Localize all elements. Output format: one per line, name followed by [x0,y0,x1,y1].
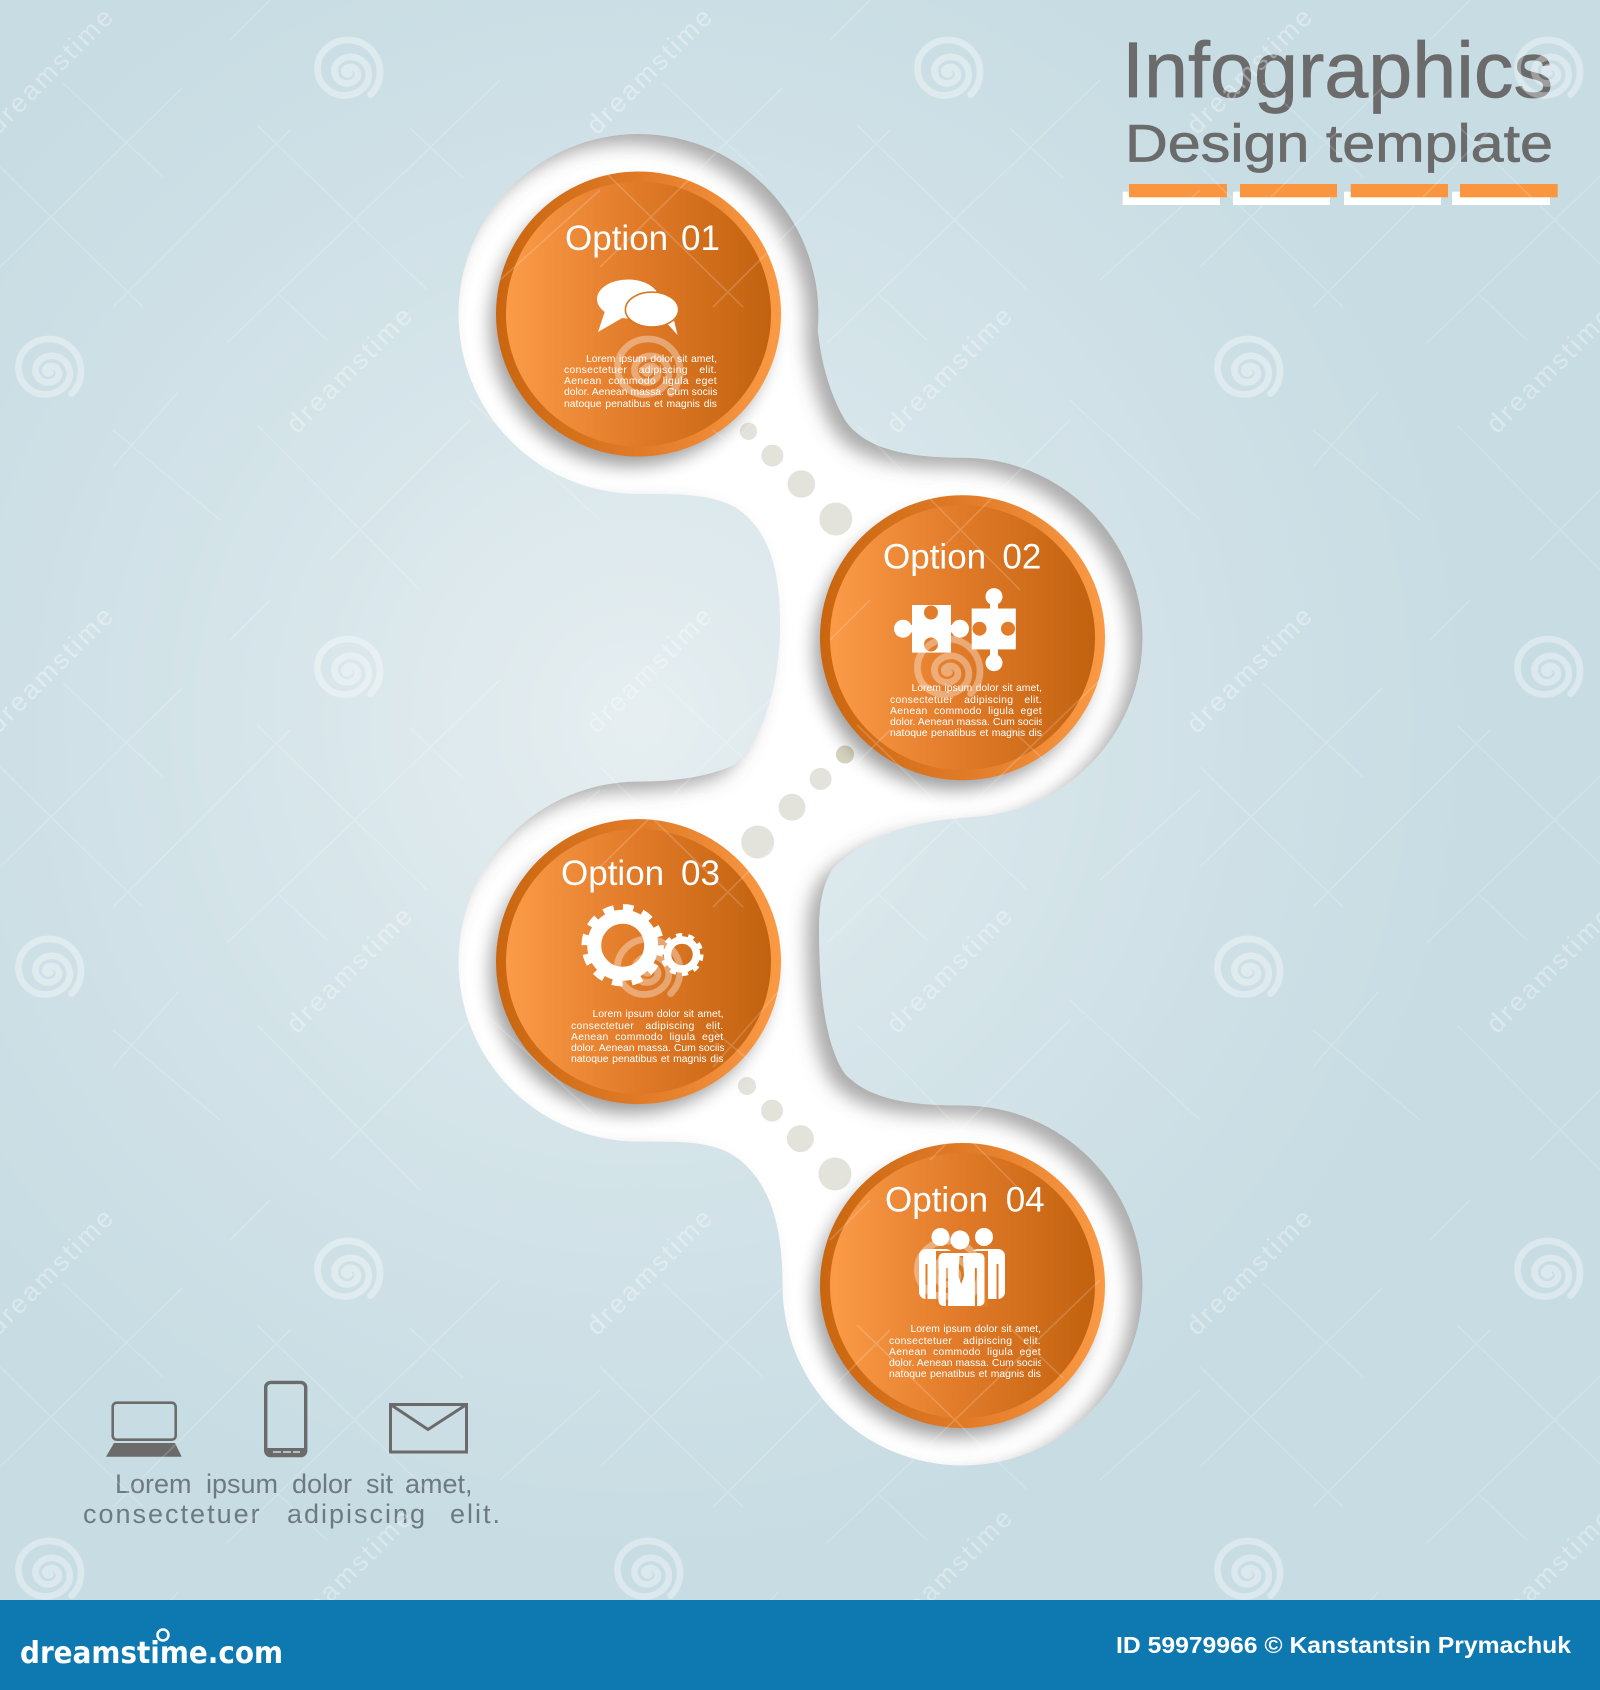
text block: option 01: Lorem ipsum dolor sit amet, [586,354,717,365]
watermark text: dreamstime [580,2,718,140]
watermark text: dreamstime [880,301,1018,439]
caption text: dolor [292,1469,352,1499]
text block: option 02: Aenean commodo ligula eget [890,706,1042,717]
caption text: sit [366,1469,393,1499]
caption text [83,1469,502,1529]
connector dots: option 1 to 2 [740,423,852,536]
text block: option 03: Aenean commodo ligula eget [571,1032,724,1043]
footer credit: ID 59979966 © Kanstantsin Prymachuk [1116,1632,1572,1658]
panel: option 01 [490,172,781,466]
watermark text: dreamstime [280,1503,418,1641]
caption text: elit. [450,1499,502,1529]
text block: option 03 [571,1009,724,1067]
title [1122,25,1553,174]
connector dots: option 3 to 4 [738,1077,851,1190]
connector dots: option 2 to 3 [741,746,854,858]
text block: option 03: dolor. Aenean massa. Cum sociis [571,1043,724,1054]
heading: option 01: Option [565,219,668,258]
text block: option 02: Lorem ipsum dolor sit amet, [912,683,1042,694]
icon: speech bubbles [597,280,679,335]
watermark text: dreamstime [880,1503,1018,1641]
heading: option 04: Option [885,1180,988,1220]
text block: option 01: dolor. Aenean massa. Cum sociis [564,387,717,398]
watermark text: dreamstime [280,301,418,439]
watermark text: dreamstime [1180,601,1318,739]
icon: team of people [919,1228,1005,1307]
text block: option 03: Lorem ipsum dolor sit amet, [592,1009,724,1020]
panel: option 03 [490,819,781,1114]
footer band [0,1600,1600,1690]
heading: option 04: 04 [1006,1180,1045,1220]
heading: option 02: 02 [1002,538,1041,576]
footer logo: dreamstime.com [20,1636,283,1671]
watermark text: dreamstime [1180,1203,1318,1341]
text block: option 01 [564,354,717,412]
text block: option 04: consectetuer adipiscing elit. [889,1336,1041,1347]
heading: option 03: Option [561,854,664,893]
title: Infographics [1122,25,1553,114]
heading: option 01: 01 [681,219,720,258]
caption text: amet, [405,1469,473,1499]
icon: puzzle pieces [894,588,1016,671]
heading: option 02: Option [883,538,986,576]
title underline bars [1123,184,1558,205]
text block: option 02: consectetuer adipiscing elit. [890,695,1042,706]
text block: option 04 [889,1324,1041,1382]
watermark text: dreamstime [880,901,1018,1039]
caption text: Lorem [115,1469,192,1499]
text block: option 02: natoque penatibus et magnis dis [890,728,1042,739]
panel: option 04 [814,1143,1105,1438]
title: Design template [1125,115,1553,174]
text block: option 03: natoque penatibus et magnis dis [571,1054,724,1065]
icon: gears [585,908,701,983]
text block: option 01: Aenean commodo ligula eget [564,376,717,387]
white connected blob panel [458,134,1142,1466]
text block: option 02 [890,683,1042,741]
watermark text: dreamstime [280,901,418,1039]
icon: smartphone [266,1382,306,1457]
caption text: consectetuer [83,1499,262,1529]
watermark text: dreamstime [580,601,718,739]
text block: option 04: Lorem ipsum dolor sit amet, [910,1324,1041,1335]
text block: option 01: consectetuer adipiscing elit. [564,365,717,376]
heading: option 03: 03 [681,854,720,893]
text block: option 01: natoque penatibus et magnis dis [564,399,717,410]
text block: option 03: consectetuer adipiscing elit. [571,1021,724,1032]
text block: option 02: dolor. Aenean massa. Cum sociis [890,717,1042,728]
caption text: ipsum [206,1469,278,1499]
panel: option 02 [814,495,1105,790]
text block: option 04: Aenean commodo ligula eget [889,1347,1041,1358]
watermark text: dreamstime [1180,2,1318,140]
icon: laptop [106,1403,182,1457]
icon: envelope [390,1404,466,1452]
caption text: adipiscing [287,1499,427,1529]
text block: option 04: dolor. Aenean massa. Cum sociis [889,1358,1041,1369]
watermark text: dreamstime [580,1203,718,1341]
text block: option 04: natoque penatibus et magnis dis [889,1369,1041,1380]
